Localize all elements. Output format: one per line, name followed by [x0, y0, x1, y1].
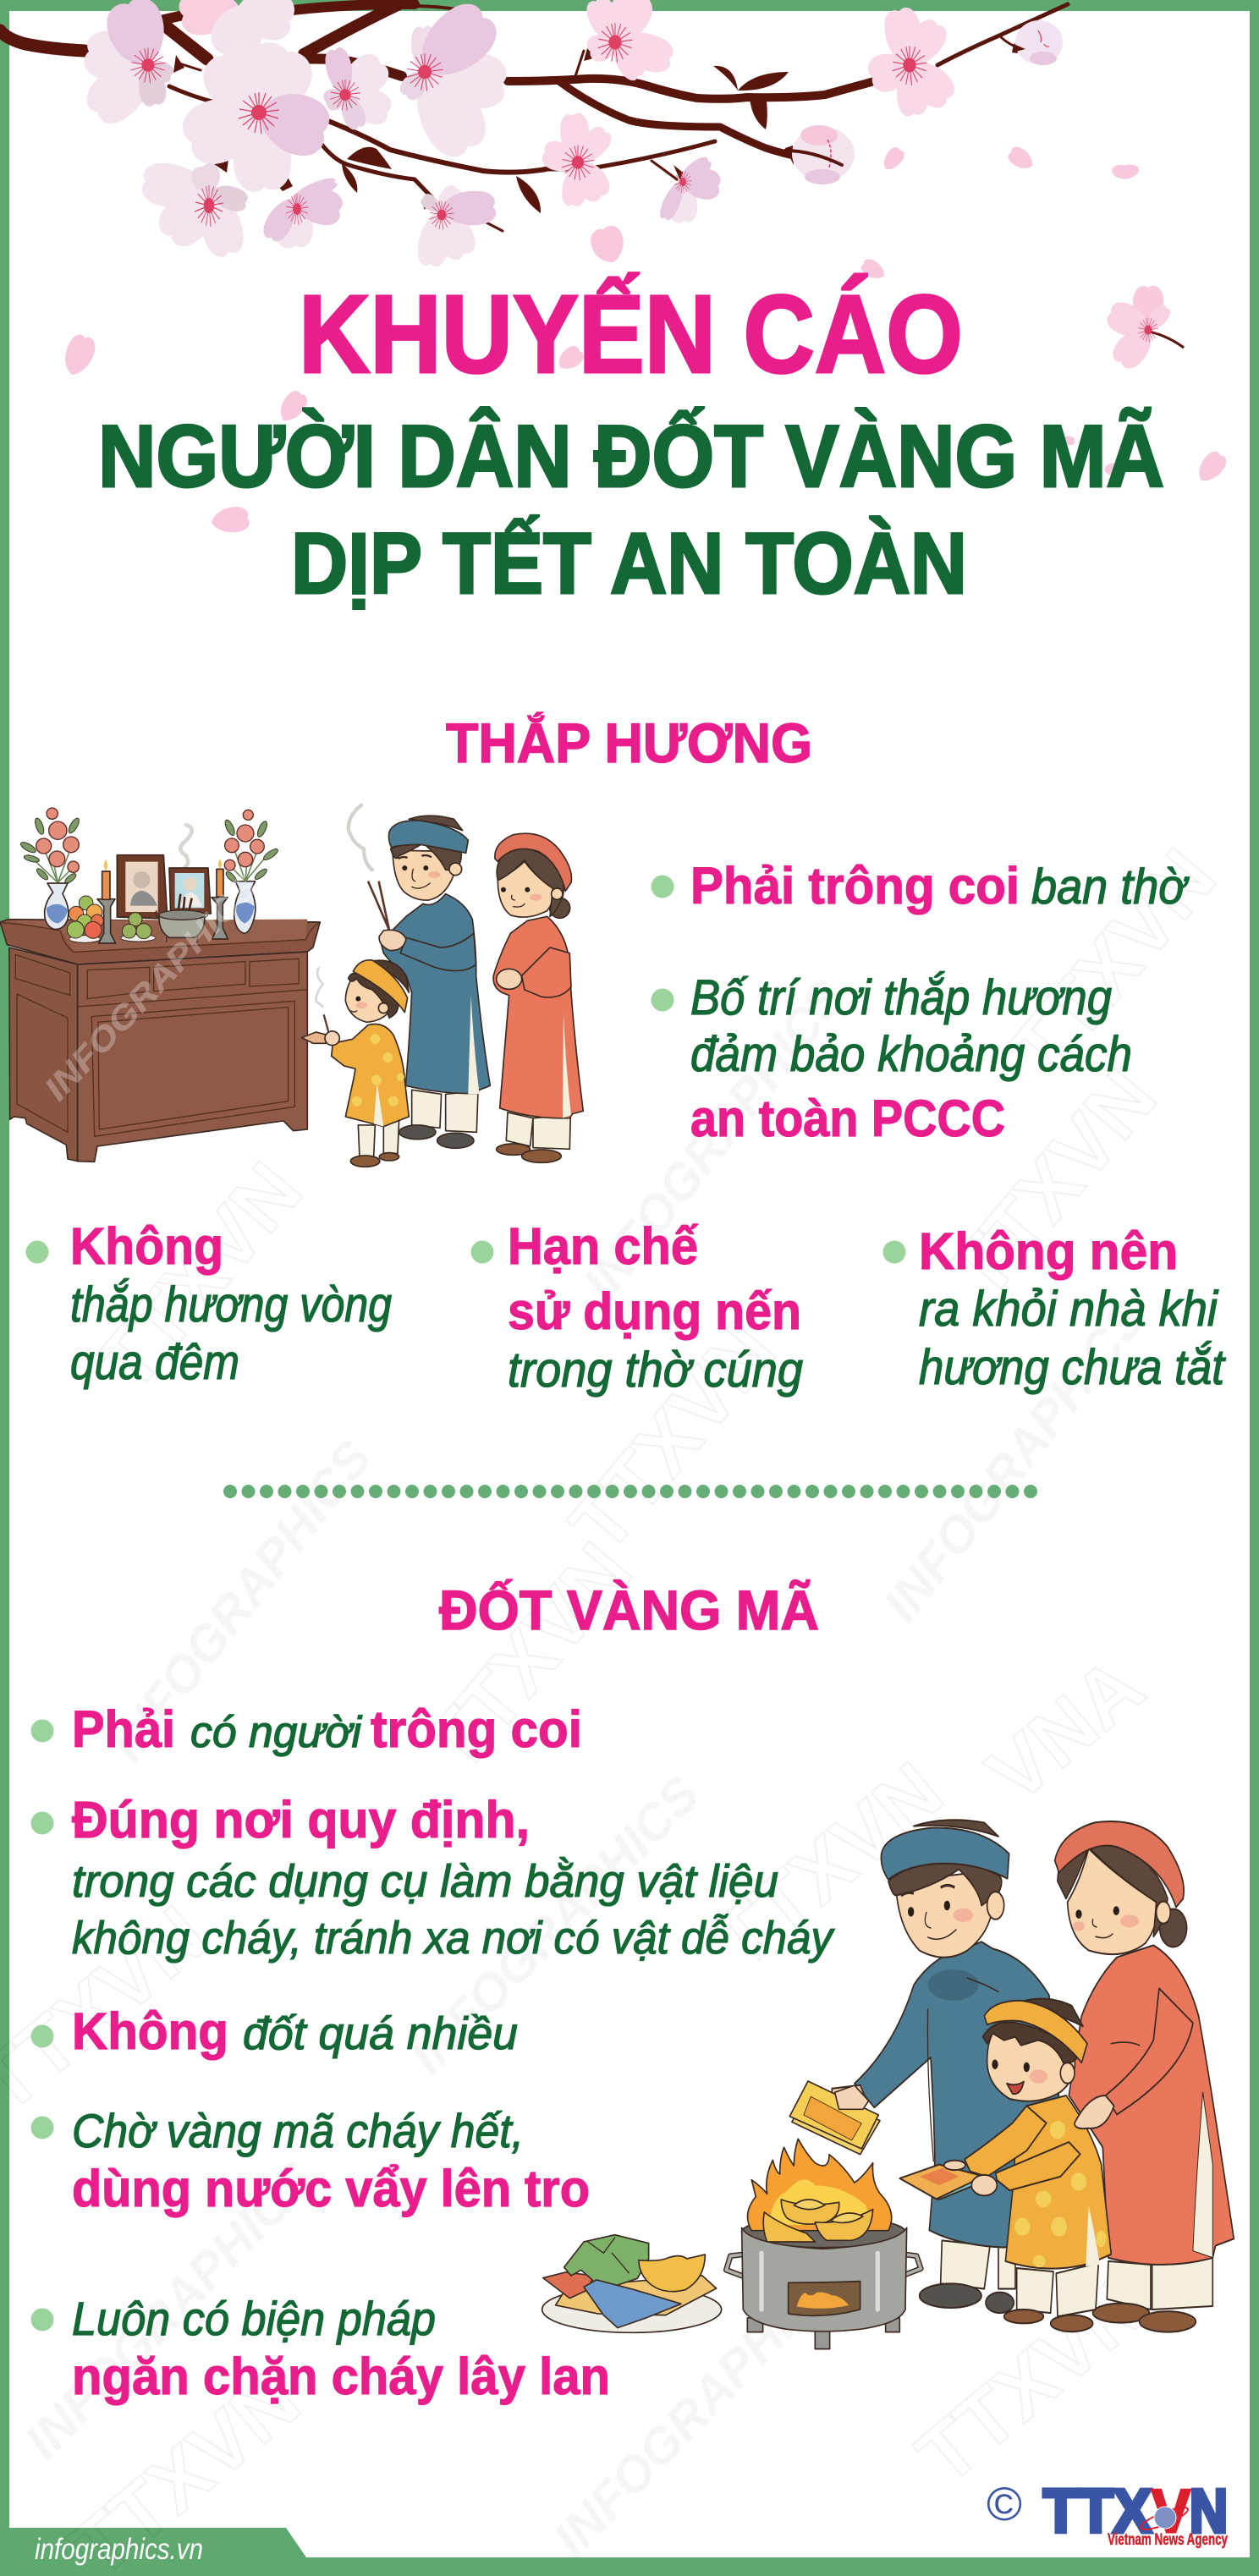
watermarks: TTXVN	[409, 1526, 649, 1788]
blossom 3	[177, 0, 299, 57]
line 2: trong các dụng cụ làm bằng vật liệu	[72, 1856, 778, 1907]
watermark on altar: INFOGRAPHICS	[37, 868, 265, 1107]
point text line 3: an toàn PCCC	[690, 1090, 1005, 1147]
bullet	[30, 2308, 54, 2332]
watermarks: VNA	[970, 1640, 1160, 1820]
offering plate	[542, 2235, 722, 2332]
man	[368, 816, 490, 1148]
blossom 8	[415, 182, 497, 269]
heading: Không	[70, 1217, 223, 1275]
woman	[1055, 1821, 1234, 2332]
flames	[748, 2139, 892, 2231]
line 1: sử dụng nến	[508, 1283, 801, 1340]
trông coi: trông coi	[371, 1700, 582, 1758]
column: không nên	[883, 1222, 1227, 1395]
watermarks: INFOGRAPHICS	[14, 2150, 325, 2469]
heading: Hạn chế	[508, 1217, 698, 1275]
watermarks: TTXVN	[900, 2261, 1163, 2502]
left flowers	[19, 808, 81, 885]
smoke from boy's incense	[316, 968, 323, 1007]
blossom bud 14	[785, 125, 855, 184]
right vase pattern	[235, 903, 255, 924]
logo: TTXVN	[1043, 2478, 1228, 2549]
blossom 13	[657, 154, 723, 223]
line 1: thắp hương vòng	[70, 1277, 392, 1332]
blossom beside title	[1103, 286, 1184, 374]
chờ vàng mã: Chờ vàng mã cháy hết,	[72, 2104, 524, 2157]
gold paper in hand	[789, 2081, 880, 2155]
title line 3: DỊP TẾT AN TOÀN	[291, 515, 967, 612]
line 2: qua đêm	[70, 1335, 239, 1390]
title line 1: KHUYẾN CÁO	[299, 272, 963, 396]
letters TTX: TTX	[1043, 2478, 1152, 2546]
man	[832, 1820, 1060, 2313]
right flowers	[223, 810, 279, 884]
burner highlights	[761, 2253, 877, 2310]
smoke above incense	[349, 805, 372, 870]
blossom bud 11	[1012, 20, 1063, 65]
burner window	[789, 2282, 860, 2315]
watermarks: TTXVN	[933, 1052, 1174, 1315]
phải: Phải	[72, 1700, 175, 1758]
bullet	[30, 2117, 54, 2139]
globe with orbit	[1139, 2503, 1190, 2534]
bullet	[651, 875, 673, 898]
watermarks: INFOGRAPHICS	[572, 969, 856, 1310]
point text line 1: Bố trí nơi thắp hương	[690, 970, 1112, 1025]
woman	[493, 833, 583, 1162]
blossom 7	[259, 175, 345, 250]
list: đốt vàng mã	[30, 1700, 835, 2405]
watermarks: TTXVN	[79, 1145, 319, 1408]
fallen petals	[59, 144, 1230, 536]
đúng nơi quy định: Đúng nơi quy định,	[72, 1791, 530, 1848]
left fruit plate	[67, 896, 103, 942]
right candlestick	[212, 859, 228, 939]
boy	[302, 960, 409, 1167]
letter N: N	[1190, 2478, 1228, 2546]
left candlestick	[97, 860, 116, 943]
dotted divider	[230, 1485, 1032, 1498]
blossom 4	[322, 46, 396, 132]
incense burner	[156, 894, 208, 942]
watermarks: INFOGRAPHICS	[872, 1290, 1157, 1632]
section heading: thắp hương: THẮP HƯƠNG	[446, 711, 812, 774]
illustration: blossom branches	[0, 0, 1230, 536]
point text italic: ban thờ	[1031, 860, 1190, 915]
watermarks: INFOGRAPHICS	[98, 1430, 382, 1771]
bullet	[883, 1240, 905, 1264]
ngăn chặn: ngăn chặn cháy lây lan	[72, 2348, 610, 2405]
illustration: family lighting incense	[302, 805, 583, 1167]
left vase pattern	[47, 904, 68, 924]
không: Không	[72, 2002, 228, 2060]
blossom 10	[865, 5, 960, 117]
line 3: không cháy, tránh xa nơi có vật dễ cháy	[72, 1913, 835, 1964]
dùng nước: dùng nước vẩy lên tro	[72, 2160, 590, 2217]
illustration: altar	[0, 808, 320, 1162]
bullet	[651, 988, 673, 1012]
watermarks: INFOGRAPHICS	[542, 2248, 854, 2567]
line 2: hương chưa tắt	[919, 1340, 1227, 1395]
blossom 5	[396, 0, 510, 165]
đốt quá nhiều: đốt quá nhiều	[243, 2008, 518, 2059]
left vase	[45, 883, 69, 930]
bullet	[30, 2025, 54, 2047]
altar body	[0, 920, 320, 1162]
có người: có người	[190, 1708, 362, 1757]
blossom 1	[79, 0, 176, 132]
bullet	[25, 1240, 49, 1264]
watermarks	[0, 832, 1233, 2576]
line 1: ra khỏi nhà khi	[919, 1282, 1219, 1337]
incense smoke on altar	[172, 825, 192, 891]
illustration: burner with offerings	[542, 2081, 921, 2349]
gold ingots	[763, 2200, 873, 2242]
watermarks: TTXVN	[697, 1745, 959, 1986]
portrait frame 1	[117, 855, 167, 919]
blossom 2	[176, 34, 335, 193]
burner legs	[747, 2318, 899, 2349]
logo: copyright symbol: ©	[987, 2477, 1022, 2530]
bullet	[30, 1812, 54, 1834]
hand holding paper	[835, 2085, 869, 2109]
branches	[0, 4, 1068, 231]
letter V: V	[1152, 2478, 1190, 2546]
right vase	[234, 882, 256, 933]
middle fruit plate	[121, 913, 156, 942]
bullet	[470, 1240, 494, 1264]
boy	[899, 1999, 1114, 2332]
point text line 2: đảm bảo khoảng cách	[690, 1027, 1132, 1082]
line 2: trong thờ cúng	[508, 1343, 803, 1398]
blossom 9	[582, 0, 677, 85]
leaves and calyxes	[173, 42, 1018, 213]
illustration: family burning votive paper	[832, 1820, 1234, 2332]
luôn có: Luôn có biện pháp	[72, 2292, 436, 2345]
watermarks: INFOGRAPHICS	[399, 1766, 710, 2084]
portrait frame 2	[169, 868, 211, 914]
section heading: đốt vàng mã: ĐỐT VÀNG MÃ	[439, 1579, 819, 1641]
blossom 6	[140, 160, 250, 261]
title line 2: NGƯỜI DÂN ĐỐT VÀNG MÃ	[98, 408, 1164, 506]
bullet	[30, 1719, 54, 1743]
column: hạn chế sử dụng nến	[470, 1217, 803, 1398]
column: không thắp hương vòng qua đêm	[25, 1217, 392, 1390]
burner body	[742, 2227, 907, 2332]
footer site label: infographics.vn	[35, 2533, 203, 2566]
blossom 12	[539, 112, 616, 208]
watermarks: TTXVN	[992, 832, 1233, 1095]
watermarks: TTXVN	[553, 1306, 793, 1568]
burner handles	[726, 2255, 921, 2280]
heading: Không nên	[919, 1222, 1178, 1280]
list: thắp hương right	[651, 857, 1190, 1147]
burner back rim	[742, 2216, 905, 2248]
point text bold: Phải trông coi	[690, 857, 1020, 915]
title	[98, 272, 1164, 612]
